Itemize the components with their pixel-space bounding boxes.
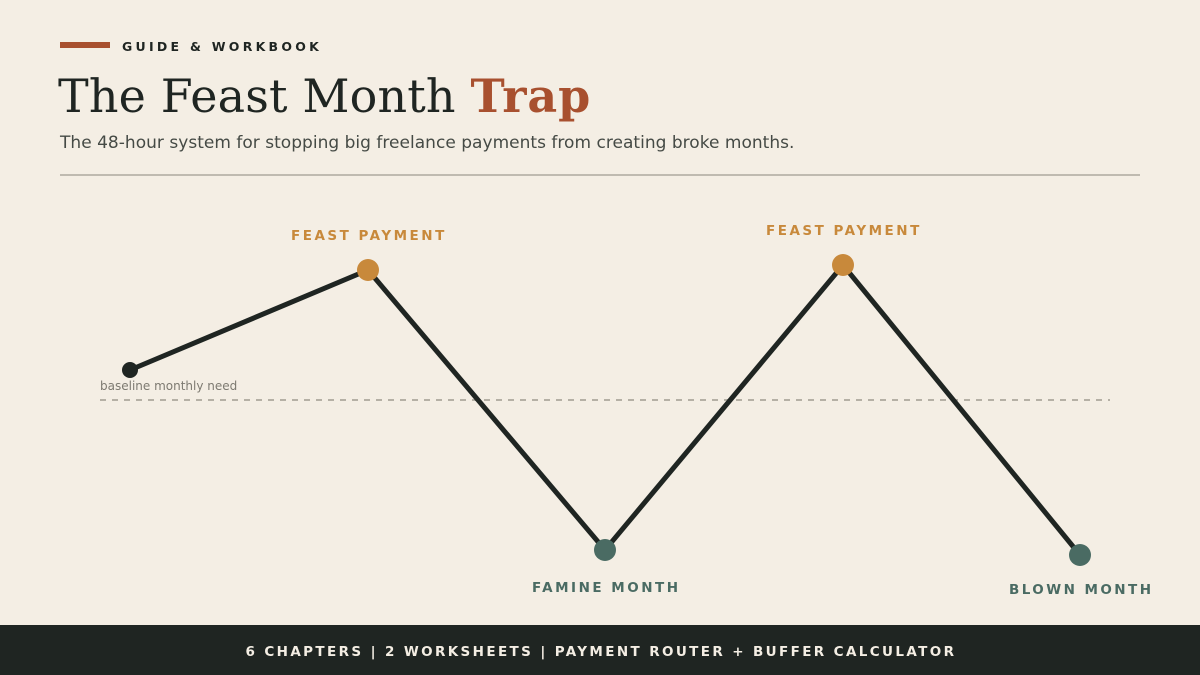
point: first feast payment bbox=[291, 228, 447, 281]
footer bar bbox=[0, 625, 1200, 675]
point: famine month bbox=[532, 539, 681, 596]
point: blown month: BLOWN MONTH bbox=[1009, 582, 1153, 598]
point: second feast payment bbox=[766, 223, 922, 276]
baseline: monthly need: baseline monthly need bbox=[100, 379, 237, 393]
point: famine month: FAMINE MONTH bbox=[532, 580, 681, 596]
chart: feast and famine income line bbox=[100, 223, 1153, 598]
eyebrow label: GUIDE & WORKBOOK bbox=[122, 39, 322, 54]
footer bar: 6 CHAPTERS | 2 WORKSHEETS | PAYMENT ROUTER + BUFFER CALCULATOR bbox=[246, 644, 956, 660]
title: The Feast Month Trap bbox=[58, 69, 591, 123]
point: second feast payment: FEAST PAYMENT bbox=[766, 223, 922, 239]
income line bbox=[130, 265, 1080, 555]
header accent bar bbox=[60, 42, 110, 48]
point: first feast payment: FEAST PAYMENT bbox=[291, 228, 447, 244]
subtitle: The 48-hour system for stopping big freelance payments from creating broke months. bbox=[59, 133, 794, 153]
point: blown month bbox=[1009, 544, 1153, 598]
start point bbox=[122, 362, 138, 378]
